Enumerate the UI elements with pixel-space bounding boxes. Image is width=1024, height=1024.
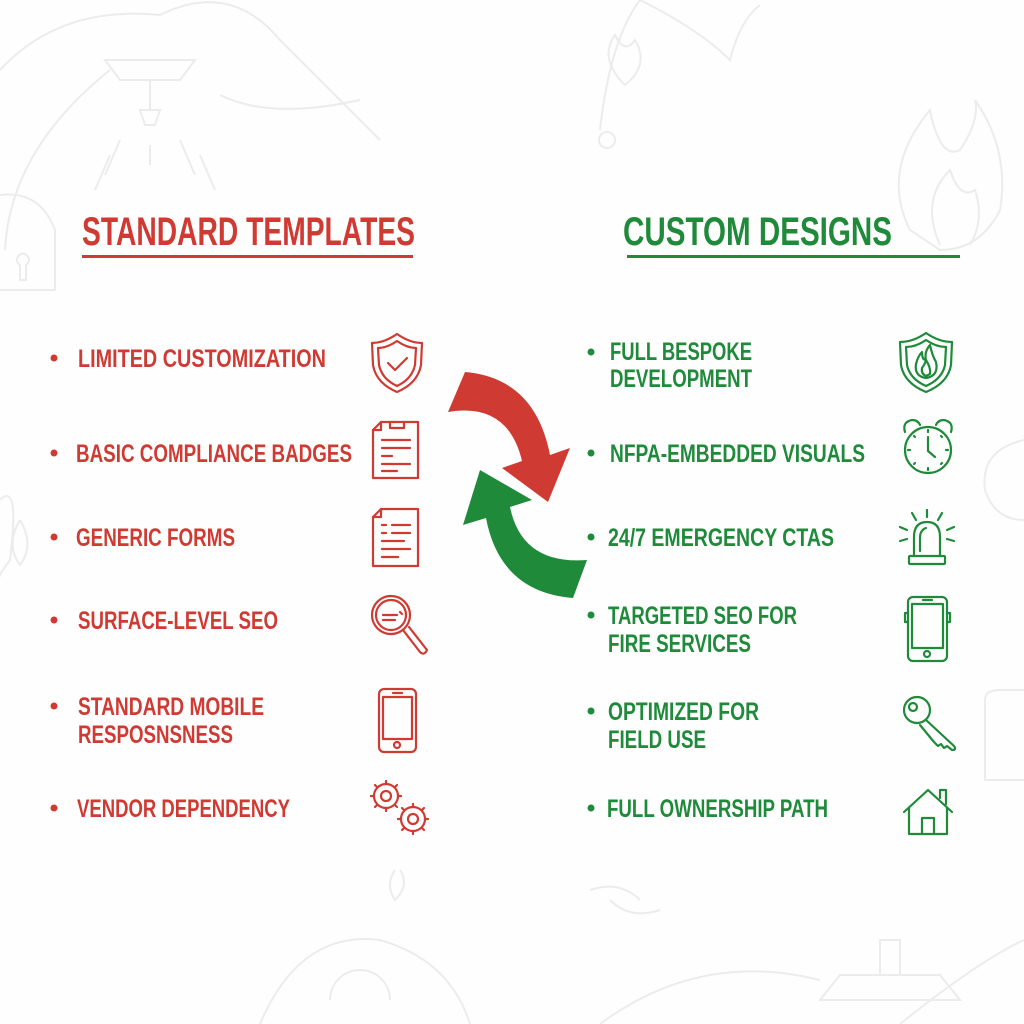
- item: full bespoke development: [588, 338, 752, 393]
- item: optimized for field use: [588, 698, 759, 754]
- item: optimized for field use: OPTIMIZED FOR: [608, 698, 759, 726]
- icon: magnifier: [372, 596, 427, 654]
- icon: gears: [371, 781, 428, 834]
- item: targeted seo: [588, 602, 797, 658]
- item: standard mobile responsiveness: RESPOSNSNESS: [78, 721, 233, 749]
- item: vendor dependency: VENDOR DEPENDENCY: [77, 795, 290, 823]
- icon: rugged phone: [905, 597, 950, 661]
- item: targeted seo: FIRE SERVICES: [608, 630, 751, 658]
- heading: standard templates: [82, 210, 415, 258]
- icon: document badge: [373, 422, 418, 478]
- icon: alarm clock: [904, 420, 952, 473]
- item: full ownership path: FULL OWNERSHIP PATH: [607, 795, 828, 823]
- item: standard mobile responsiveness: [50, 693, 264, 749]
- item: limited customization: LIMITED CUSTOMIZATION: [78, 345, 326, 373]
- arrow: red (templates to custom): [448, 372, 570, 502]
- item: surface-level seo: SURFACE-LEVEL SEO: [78, 607, 278, 635]
- icon: siren: [900, 510, 954, 564]
- arrow: green (custom to templates): [463, 470, 587, 598]
- panel: custom designs list: [588, 338, 865, 823]
- panel: standard templates list: [50, 345, 352, 823]
- icon: house: [904, 790, 952, 834]
- icon: phone: [379, 689, 416, 752]
- icon: shield fire: [900, 333, 952, 392]
- icon: key: [904, 697, 955, 750]
- heading: custom designs: CUSTOM DESIGNS: [623, 210, 892, 254]
- item: optimized for field use: FIELD USE: [608, 726, 706, 754]
- item: standard mobile responsiveness: STANDARD MOBILE: [78, 693, 264, 721]
- item: generic forms: [50, 524, 235, 552]
- heading: standard templates: STANDARD TEMPLATES: [82, 210, 415, 254]
- item: surface-level seo: [50, 607, 278, 635]
- item: full bespoke development: FULL BESPOKE: [610, 338, 752, 366]
- icon: shield check: [372, 334, 422, 392]
- item: basic compliance badges: BASIC COMPLIANCE BADGES: [76, 440, 352, 468]
- item: targeted seo: TARGETED SEO FOR: [608, 602, 797, 630]
- item: generic forms: GENERIC FORMS: [76, 524, 235, 552]
- item: emergency ctas: 24/7 EMERGENCY CTAS: [608, 524, 834, 552]
- item: full bespoke development: DEVELOPMENT: [610, 365, 752, 393]
- item: vendor dependency: [50, 795, 290, 823]
- item: nfpa visuals: NFPA-EMBEDDED VISUALS: [610, 440, 865, 468]
- icon: form document: [373, 509, 418, 566]
